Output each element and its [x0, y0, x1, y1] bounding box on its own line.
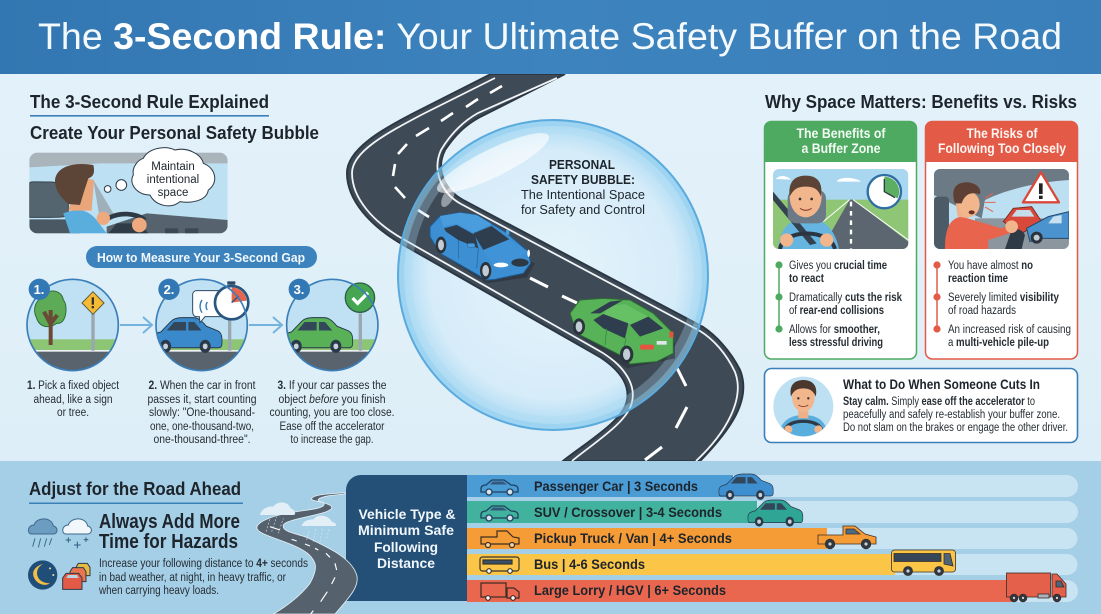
bar: suv: SUV / Crossover | 3-4 Seconds	[534, 504, 722, 520]
callout text: peacefully and safely re-establish your buffer zone.	[843, 409, 1060, 421]
hazards heading: Always Add More	[99, 511, 240, 533]
step 1	[23, 277, 123, 419]
bubble caption: PERSONAL	[549, 157, 615, 172]
step 3 text: Ease off the accelerator	[280, 421, 385, 433]
risks list: Severely limited visibility	[948, 292, 1060, 304]
hazards heading	[99, 511, 240, 553]
step 3 text	[270, 380, 394, 446]
risks list: a multi-vehicle pile-up	[948, 337, 1049, 349]
benefits title	[796, 126, 886, 156]
callout: someone cuts in	[764, 368, 1078, 442]
illustration: driver thinking	[29, 148, 228, 233]
heading: adjust for road: Adjust for the Road Ahead	[29, 479, 241, 499]
step 2 text: 2. When the car in front	[148, 380, 256, 392]
risks title	[938, 126, 1066, 156]
illustration: calm driver and clock	[773, 169, 908, 249]
step 2 text	[148, 380, 256, 446]
bar: lorry: Large Lorry / HGV | 6+ Seconds	[534, 582, 726, 598]
benefits title: a Buffer Zone	[802, 141, 881, 156]
pill: how to measure	[86, 246, 317, 268]
heading: why space matters: Why Space Matters: Benefits vs. Risks	[765, 92, 1077, 112]
callout text	[843, 376, 1068, 434]
number 2: 2.	[164, 282, 174, 297]
step 2 text: one-thousand-three".	[154, 434, 250, 446]
benefits list: to react	[789, 273, 824, 285]
thought text: space	[158, 187, 188, 199]
hazards text: in bad weather, at night, in heavy traffic, or	[99, 572, 286, 584]
benefits list	[775, 260, 903, 349]
thought text: Maintain	[151, 161, 195, 173]
panel: why space matters	[764, 92, 1078, 442]
bar: pickup	[467, 526, 1078, 549]
thought text: intentional	[147, 174, 199, 186]
bubble caption: SAFETY BUBBLE:	[531, 172, 635, 187]
pill: how to measure: How to Measure Your 3-Second Gap	[97, 250, 305, 265]
bubble backdrop	[398, 120, 708, 430]
chart label panel: Vehicle Type &	[358, 506, 456, 522]
chart label panel: Distance	[377, 555, 435, 571]
step 2 text: passes it, start counting	[148, 394, 256, 406]
icon: tree and sign	[26, 278, 120, 372]
step 2	[148, 277, 256, 446]
blue car	[430, 213, 535, 283]
hazards text: when carrying heavy loads.	[98, 585, 219, 597]
benefits list: Dramatically cuts the risk	[789, 292, 903, 304]
risks list: of road hazards	[948, 305, 1016, 317]
step 3 text: object before you finish	[278, 394, 386, 406]
bar: pickup: Pickup Truck / Van | 4+ Seconds	[534, 530, 732, 546]
risks list	[933, 260, 1071, 349]
benefits list: Gives you crucial time	[789, 260, 887, 272]
step 3 text: counting, you are too close.	[270, 407, 394, 419]
risks title: Following Too Closely	[938, 141, 1066, 156]
chart label panel: Following	[374, 539, 438, 555]
step 3 text: to increase the gap.	[290, 434, 374, 446]
card: risks	[925, 121, 1078, 359]
risks list: An increased risk of causing	[948, 324, 1071, 336]
title: The 3-Second Rule: Your Ultimate Safety Buffer on the Road	[38, 16, 1062, 57]
risks title: The Risks of	[966, 126, 1038, 141]
step 1 text: or tree.	[57, 407, 89, 419]
winding road	[347, 74, 743, 461]
icon: calm driver avatar	[773, 377, 833, 437]
small winding road	[257, 493, 357, 614]
step 2 text: slowly: "One-thousand-	[149, 407, 255, 419]
hazards heading: Time for Hazards	[99, 531, 238, 553]
chart label panel: Minimum Safe	[358, 522, 454, 538]
risks list: reaction time	[948, 273, 1008, 285]
step 1 text: 1. Pick a fixed object	[27, 380, 120, 392]
icons: weather, night and traffic hazards	[28, 519, 91, 590]
callout text: What to Do When Someone Cuts In	[843, 376, 1040, 392]
panel: bottom band	[0, 461, 1101, 614]
chart label panel	[346, 475, 467, 601]
step 1 text	[27, 380, 120, 419]
bar: passenger car: Passenger Car | 3 Seconds	[534, 478, 698, 494]
icon: green car and check sign	[286, 278, 379, 372]
step 3 text: 3. If your car passes the	[278, 380, 386, 392]
bar: passenger car	[467, 474, 1078, 500]
bubble caption	[521, 157, 645, 217]
benefits title: The Benefits of	[796, 126, 886, 141]
bubble caption: for Safety and Control	[521, 202, 645, 217]
subheading: Create Your Personal Safety Bubble	[30, 123, 319, 143]
bar: bus: Bus | 4-6 Seconds	[534, 556, 645, 572]
step 1 text: ahead, like a sign	[34, 394, 112, 406]
green car	[570, 298, 675, 368]
heading: rule explained: The 3-Second Rule Explained	[30, 92, 269, 112]
hazards text	[98, 558, 308, 597]
thought text	[147, 161, 199, 199]
hazards text: Increase your following distance to 4+ seconds	[99, 558, 308, 570]
arrow: step 1 to 2	[120, 317, 152, 333]
card: benefits	[764, 121, 917, 359]
callout text: Stay calm. Simply ease off the accelerator to	[843, 396, 1035, 408]
arrow: step 2 to 3	[249, 317, 282, 333]
personal safety bubble	[398, 120, 708, 430]
header banner	[0, 0, 1101, 74]
benefits list: less stressful driving	[789, 337, 883, 349]
benefits list: Allows for smoother,	[789, 324, 880, 336]
step 2 text: one, one-thousand-two,	[150, 421, 254, 433]
icon: car and stopwatch	[155, 278, 250, 372]
benefits list: of rear-end collisions	[789, 305, 884, 317]
bar: suv	[467, 500, 1078, 527]
illustration: stressed driver and crash	[934, 169, 1069, 249]
number 3: 3.	[294, 282, 304, 297]
bar: bus	[467, 550, 1078, 576]
panel: rule explained	[23, 92, 395, 446]
step 3	[270, 277, 394, 446]
number 1: 1.	[34, 282, 44, 297]
chart: vehicle following distance	[346, 474, 1078, 602]
risks list: You have almost no	[948, 260, 1033, 272]
bubble caption: The Intentional Space	[521, 187, 645, 202]
bar: lorry	[467, 573, 1078, 602]
